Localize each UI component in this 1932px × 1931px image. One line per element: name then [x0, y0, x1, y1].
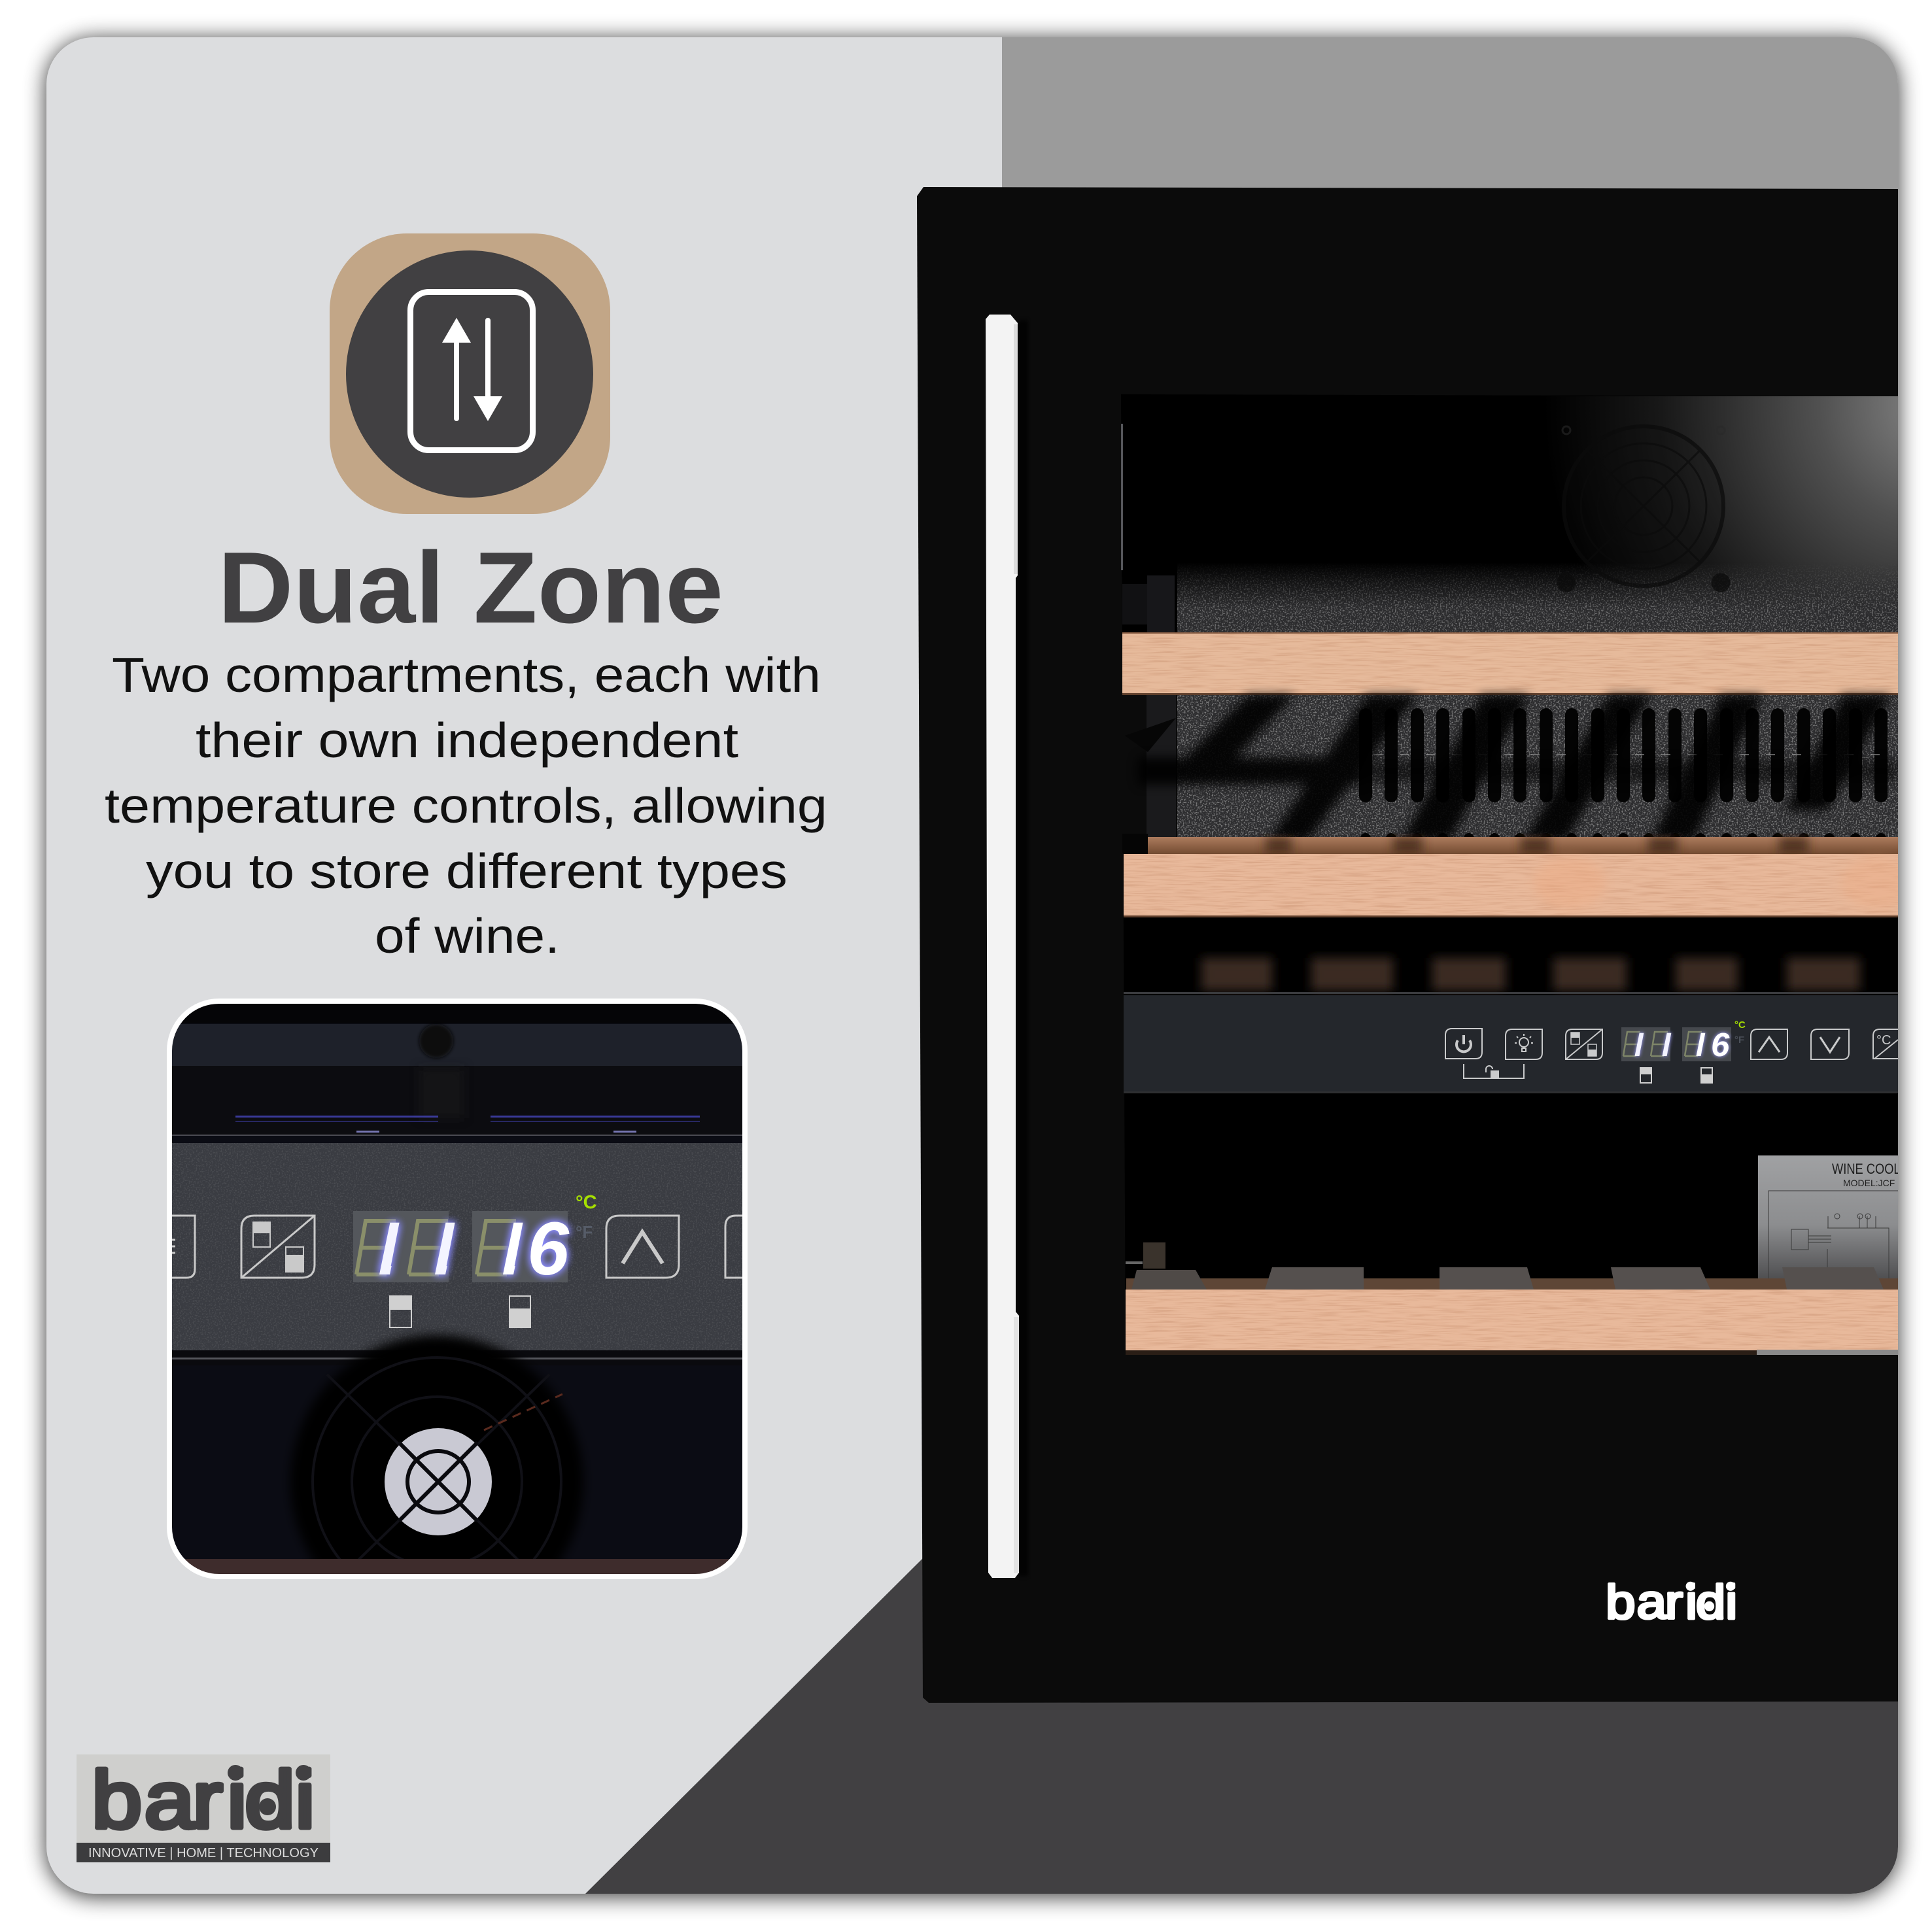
- light button: [1506, 1029, 1542, 1059]
- wine shelf 3: [1126, 1290, 1898, 1355]
- zone indicators: [1640, 1068, 1712, 1083]
- temperature display right: [1682, 1026, 1731, 1063]
- arrow: up: [442, 318, 471, 421]
- temperature display right: 6: [527, 1207, 570, 1291]
- blurred wood reflections: [1201, 958, 1860, 991]
- tagline band: [77, 1843, 330, 1862]
- description text: temperature controls, allowing: [105, 778, 827, 833]
- wiring diagram: [1768, 1191, 1898, 1282]
- unit labels: °F: [576, 1222, 593, 1242]
- description text: Two compartments, each with: [112, 647, 821, 702]
- lock bracket: [1464, 1064, 1524, 1078]
- temperature display right: 1: [1690, 1026, 1708, 1063]
- vented rear panel: [1177, 695, 1898, 839]
- temperature display right: 1: [489, 1207, 530, 1291]
- tagline band: INNOVATIVE | HOME | TECHNOLOGY: [88, 1846, 319, 1860]
- description text: you to store different types: [146, 844, 787, 898]
- power button: [1445, 1029, 1482, 1059]
- bottle shadows: [1138, 695, 1898, 840]
- down button: [1811, 1029, 1849, 1059]
- temperature display right: 6: [1711, 1026, 1730, 1063]
- title: Dual Zone: [218, 531, 723, 644]
- rating label: WINE COOLER: [1832, 1161, 1917, 1177]
- up button: [606, 1216, 679, 1278]
- temperature display left: 1: [1656, 1026, 1674, 1063]
- shelf 2 back rail: [1122, 834, 1898, 855]
- brand logo: baridi: [92, 1754, 315, 1845]
- door logo: baridi: [1606, 1576, 1737, 1629]
- zone select button: [1566, 1029, 1602, 1059]
- zone indicators: [390, 1296, 530, 1327]
- unit labels: [1734, 1019, 1746, 1046]
- cooling fan grille: [1558, 426, 1729, 591]
- rear textured panel: [1177, 562, 1898, 633]
- icon: rounded cabinet outline: [411, 292, 532, 450]
- close-up control strip: [169, 1143, 745, 1365]
- wine shelf 1: [1122, 632, 1898, 695]
- glass window: [1121, 394, 1917, 1355]
- wood edge: [169, 1559, 745, 1577]
- temperature display left: [1621, 1026, 1674, 1063]
- blue light streaks: [235, 1116, 700, 1133]
- unit labels: °C: [1734, 1019, 1746, 1031]
- description text: their own independent: [196, 713, 738, 768]
- up button: [1751, 1029, 1787, 1059]
- fan close-up: [290, 1335, 583, 1628]
- description text: of wine.: [375, 908, 560, 963]
- vent slots: [1366, 715, 1881, 796]
- temperature display left: [353, 1207, 462, 1291]
- unit labels: °F: [1734, 1034, 1744, 1046]
- bottom dark diagonal panel: [585, 1558, 1898, 1894]
- temperature display left: 1: [365, 1207, 407, 1291]
- upper interior band: [169, 1024, 745, 1135]
- bottle rest wedges: [1126, 1242, 1898, 1290]
- temperature display left: 1: [1629, 1026, 1647, 1063]
- unit labels: [576, 1192, 597, 1242]
- panel: control panel close-up photo: [169, 1001, 745, 1628]
- upper compartment with glare: [1177, 396, 1898, 633]
- left side pillar upper: [1122, 575, 1175, 633]
- icon: dual zone badge: [330, 233, 610, 514]
- side pillar lower: [1122, 695, 1177, 837]
- zone select button: [241, 1216, 315, 1278]
- control panel: [1124, 992, 1898, 1093]
- unit switch button: [1873, 1029, 1898, 1059]
- unit labels: °C: [576, 1192, 597, 1213]
- description text: [105, 647, 827, 963]
- temperature display left: 1: [421, 1207, 462, 1291]
- temperature display right: [472, 1207, 570, 1291]
- wine shelf 2: [1124, 854, 1913, 917]
- partial left button: [169, 1216, 195, 1278]
- top right grey panel: [1002, 37, 1898, 194]
- rating label: MODEL:JCF: [1843, 1178, 1895, 1188]
- fridge door: [917, 187, 1917, 1703]
- door handle: [986, 315, 1019, 1578]
- partial right button: [725, 1216, 745, 1278]
- arrow: down: [474, 318, 502, 421]
- rating label: [1758, 1155, 1917, 1282]
- unit switch button: °C: [1876, 1033, 1891, 1048]
